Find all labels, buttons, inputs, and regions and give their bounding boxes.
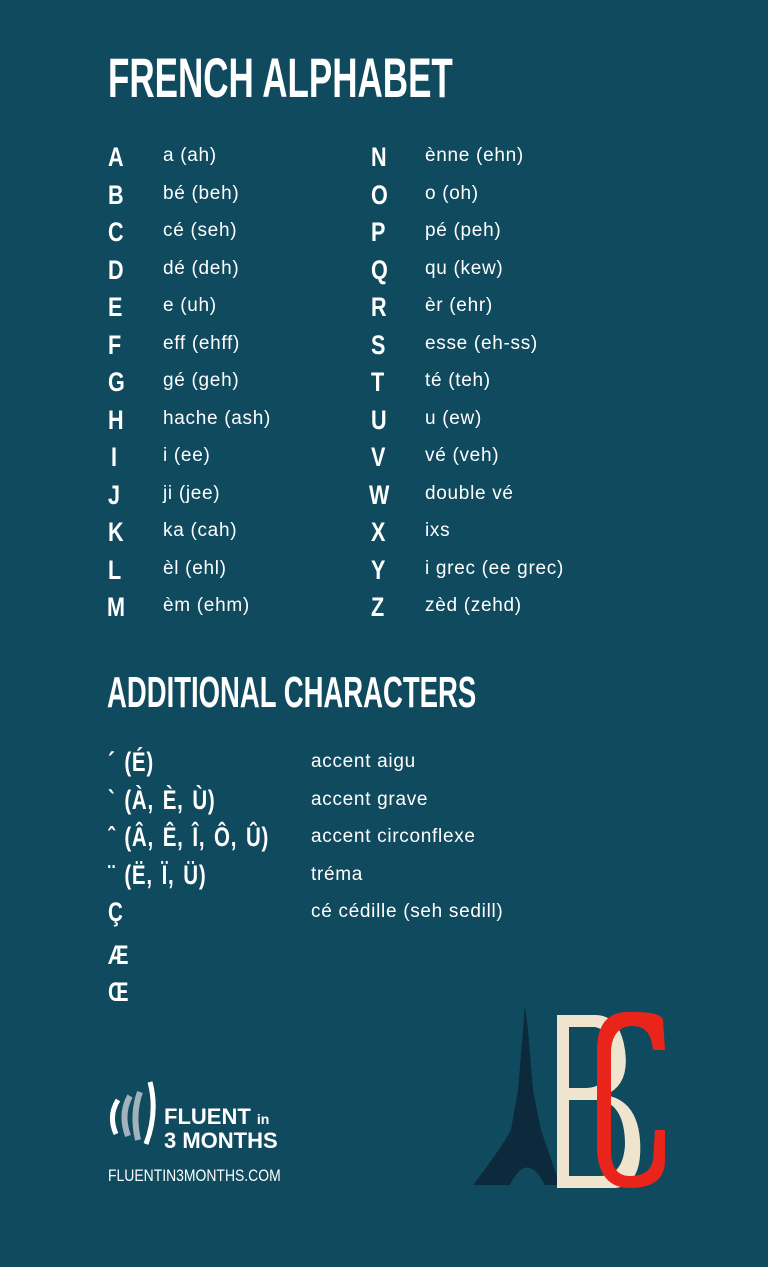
additional characters list: accent circonflexe: [311, 826, 476, 847]
alphabet list: zèd (zehd): [425, 595, 522, 616]
additional characters list: tréma: [311, 864, 363, 885]
illustration: eiffel tower with B and C: [473, 1006, 665, 1188]
alphabet list: G: [108, 367, 125, 397]
alphabet list: vé (veh): [425, 445, 499, 466]
alphabet list: U: [371, 405, 387, 435]
additional characters list: cé cédille (seh sedill): [311, 901, 503, 922]
alphabet list: S: [371, 330, 385, 360]
alphabet list: esse (eh-ss): [425, 333, 538, 354]
alphabet list: E: [108, 292, 122, 322]
heading: additional characters: ADDITIONAL CHARACTERS: [107, 668, 476, 717]
alphabet list: O: [371, 180, 388, 210]
alphabet list: ji (jee): [163, 483, 220, 504]
alphabet list: F: [108, 330, 121, 360]
additional characters list: [108, 747, 503, 1007]
alphabet list: J: [108, 480, 120, 510]
alphabet list: I: [111, 442, 117, 472]
alphabet list: H: [108, 405, 124, 435]
icon: sound waves: [110, 1081, 156, 1145]
alphabet list: ka (cah): [163, 520, 237, 541]
alphabet list: o (oh): [425, 183, 479, 204]
alphabet list: èr (ehr): [425, 295, 493, 316]
additional characters list: accent aigu: [311, 751, 416, 772]
alphabet list: e (uh): [163, 295, 217, 316]
alphabet list: L: [108, 555, 121, 585]
alphabet list: A: [108, 142, 124, 172]
alphabet list: Z: [371, 592, 384, 622]
alphabet list: u (ew): [425, 408, 482, 429]
alphabet list: a (ah): [163, 145, 217, 166]
alphabet list: cé (seh): [163, 220, 237, 241]
alphabet list: eff (ehff): [163, 333, 240, 354]
additional characters list: ´ (É): [108, 747, 154, 777]
alphabet list: i grec (ee grec): [425, 558, 564, 579]
alphabet list: K: [108, 517, 124, 547]
alphabet list: M: [107, 592, 125, 622]
alphabet list: D: [108, 255, 124, 285]
alphabet list: qu (kew): [425, 258, 503, 279]
alphabet list: bé (beh): [163, 183, 239, 204]
alphabet list: B: [108, 180, 124, 210]
alphabet list: pé (peh): [425, 220, 501, 241]
additional characters list: Ç: [108, 897, 124, 927]
alphabet list: Y: [371, 555, 385, 585]
additional characters list: ˆ (Â, Ê, Î, Ô, Û): [108, 822, 269, 852]
alphabet list: double vé: [425, 483, 514, 504]
alphabet list: X: [371, 517, 385, 547]
additional characters list: ` (À, È, Ù): [108, 785, 216, 815]
alphabet list: P: [371, 217, 385, 247]
additional characters list: accent grave: [311, 789, 428, 810]
alphabet list: ènne (ehn): [425, 145, 524, 166]
logo: 3 MONTHS: [164, 1128, 278, 1153]
alphabet list: gé (geh): [163, 370, 239, 391]
alphabet list: C: [108, 217, 124, 247]
alphabet list: ixs: [425, 520, 450, 541]
alphabet list: V: [371, 442, 385, 472]
alphabet list: [107, 142, 564, 622]
additional characters list: Æ: [108, 940, 129, 970]
alphabet list: R: [371, 292, 387, 322]
alphabet list: N: [371, 142, 387, 172]
alphabet list: Q: [371, 255, 388, 285]
logo: [108, 1081, 281, 1185]
alphabet list: i (ee): [163, 445, 210, 466]
additional characters list: Œ: [108, 977, 129, 1007]
alphabet list: hache (ash): [163, 408, 271, 429]
alphabet list: W: [369, 480, 389, 510]
alphabet list: T: [371, 367, 384, 397]
logo: FLUENTIN3MONTHS.COM: [108, 1166, 281, 1185]
additional characters list: ¨ (Ë, Ï, Ü): [108, 860, 206, 890]
alphabet list: èm (ehm): [163, 595, 250, 616]
alphabet list: té (teh): [425, 370, 491, 391]
alphabet list: dé (deh): [163, 258, 239, 279]
alphabet list: èl (ehl): [163, 558, 227, 579]
logo: FLUENT in: [164, 1104, 269, 1129]
title: FRENCH ALPHABET: [108, 46, 453, 109]
